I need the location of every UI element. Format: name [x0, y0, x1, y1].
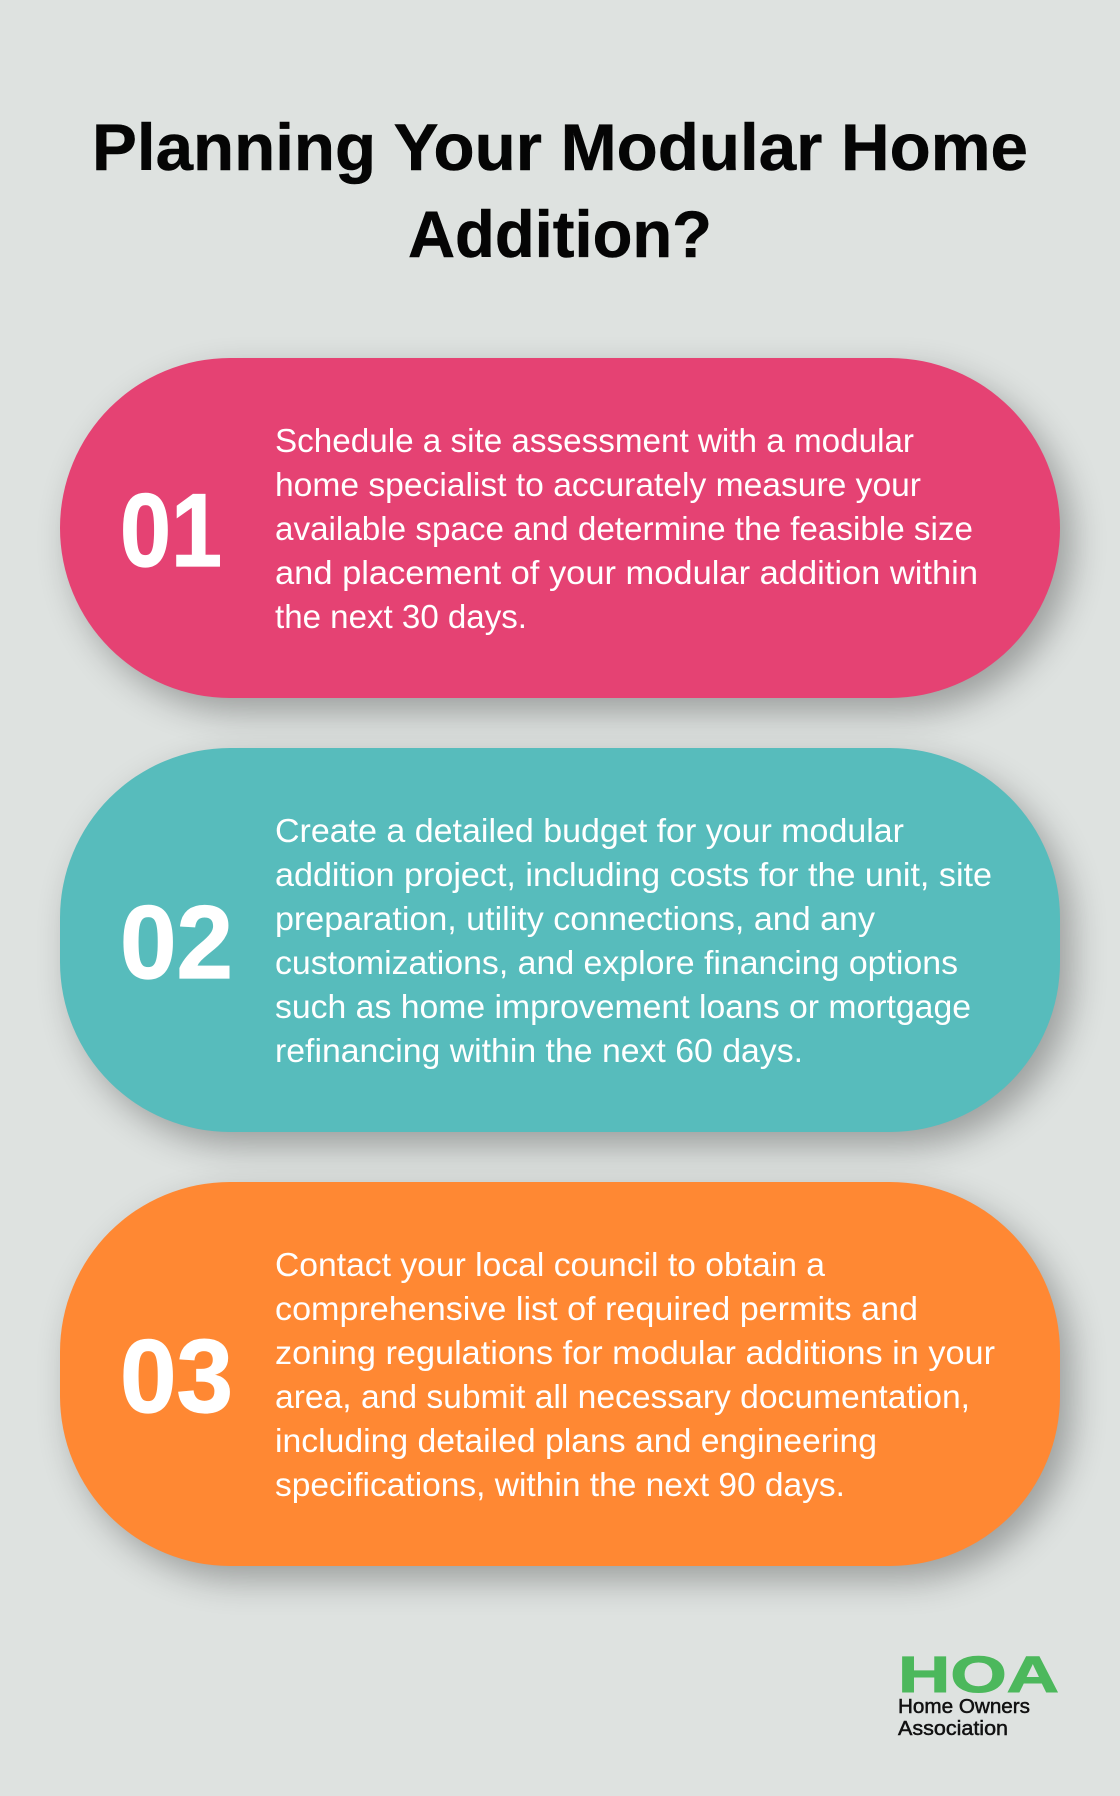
title: Addition?: [408, 197, 712, 271]
step 01 text: Schedule a site assessment with a modular: [275, 422, 914, 459]
logo: HOA Home Owners Association: Association: [898, 1718, 1008, 1740]
step 02 text: customizations, and explore financing options: [275, 944, 958, 981]
step 01 text: the next 30 days.: [275, 598, 527, 635]
panel: step 01: [60, 358, 1060, 698]
logo: HOA Home Owners Association: Home Owners: [898, 1696, 1030, 1718]
step 02 text: preparation, utility connections, and any: [275, 900, 876, 937]
step 03 text: specifications, within the next 90 days.: [275, 1466, 845, 1503]
panel: step 02: [60, 748, 1060, 1132]
title: [92, 110, 1028, 271]
title: Planning Your Modular Home: [92, 110, 1028, 184]
step 02 text: refinancing within the next 60 days.: [275, 1032, 803, 1069]
step 03 text: [275, 1246, 995, 1503]
step 02 text: Create a detailed budget for your modular: [275, 812, 904, 849]
step 03 text: area, and submit all necessary documentation,: [275, 1378, 970, 1415]
step number 02: 02: [120, 885, 233, 1001]
step 01 text: home specialist to accurately measure your: [275, 466, 921, 503]
step 03 text: comprehensive list of required permits and: [275, 1290, 918, 1327]
step 02 text: [275, 812, 992, 1069]
logo: HOA Home Owners Association: HOA: [898, 1646, 1059, 1703]
step 02 text: addition project, including costs for the unit, site: [275, 856, 992, 893]
logo: HOA Home Owners Association: [898, 1646, 1059, 1740]
step 01 text: and placement of your modular addition within: [275, 554, 978, 591]
step 01 text: [275, 422, 978, 635]
step 03 text: including detailed plans and engineering: [275, 1422, 877, 1459]
step number 03: 03: [120, 1319, 233, 1435]
step 03 text: zoning regulations for modular additions in your: [275, 1334, 995, 1371]
step 02 text: such as home improvement loans or mortgage: [275, 988, 971, 1025]
step 03 text: Contact your local council to obtain a: [275, 1246, 826, 1283]
panel: step 03: [60, 1182, 1060, 1566]
step number 01: 01: [120, 473, 222, 589]
step 01 text: available space and determine the feasible size: [275, 510, 973, 547]
